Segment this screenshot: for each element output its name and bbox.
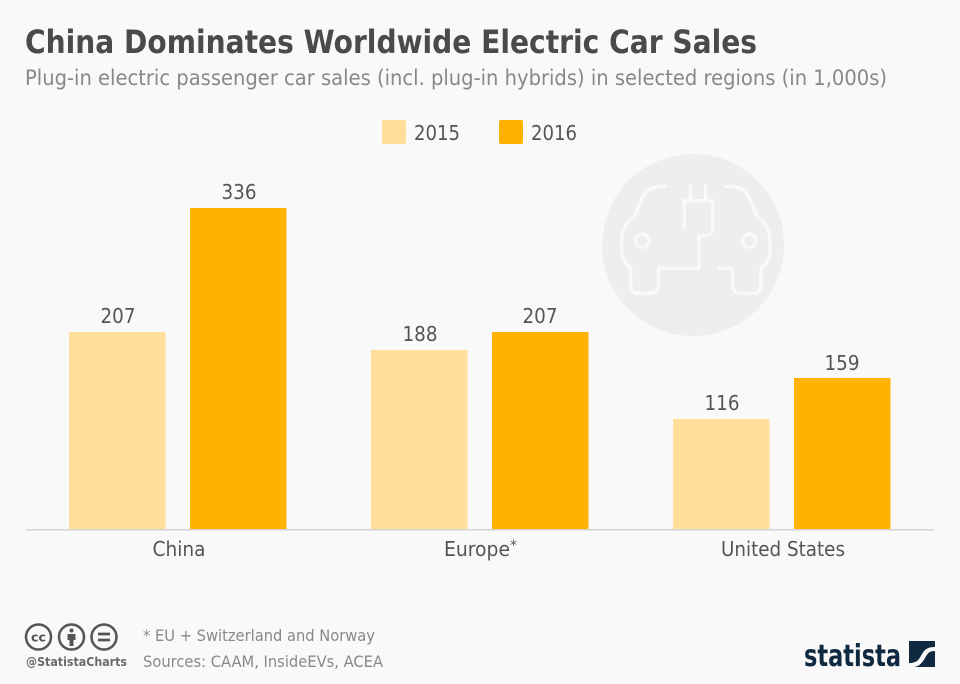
legend: 2015: 2015 (414, 121, 460, 145)
group: China (69, 180, 286, 561)
axis line (26, 529, 934, 530)
legend: 2016: 2016 (531, 121, 577, 145)
legend (382, 120, 577, 145)
statista logo (804, 639, 935, 674)
subtitle: Plug-in electric passenger car sales (incl. plug-in hybrids) in selected regions (in 1,000s) (25, 66, 887, 90)
logo mark (909, 641, 935, 667)
group: Europe: Europe (444, 537, 510, 561)
handle: @StatistaCharts (26, 655, 127, 669)
icon: attribution (59, 624, 84, 650)
group: Europe: 188 (402, 322, 438, 346)
bar chart (26, 180, 934, 561)
icon: electric car with plug (602, 154, 784, 336)
sources: Sources: CAAM, InsideEVs, ACEA (143, 652, 383, 671)
legend: 2016 (499, 120, 577, 145)
footnote: * EU + Switzerland and Norway (143, 626, 375, 645)
group: United States: United States (721, 537, 845, 561)
logo wordmark: statista (804, 639, 901, 674)
title: China Dominates Worldwide Electric Car Sales (25, 23, 757, 61)
group: United States: 116 (704, 391, 740, 415)
group: Europe: 207 (522, 304, 558, 328)
icon: no derivatives (92, 624, 116, 650)
icon: creative commons: cc (31, 630, 46, 644)
legend: 2015 (382, 120, 460, 145)
group: China: 207 (100, 304, 136, 328)
group: United States (673, 351, 890, 561)
group: China: China (152, 537, 206, 561)
group: United States: 159 (824, 351, 860, 375)
group: Europe: * (510, 538, 517, 554)
group: Europe (371, 304, 588, 561)
group: China: 336 (222, 180, 256, 204)
license icons (26, 624, 116, 650)
